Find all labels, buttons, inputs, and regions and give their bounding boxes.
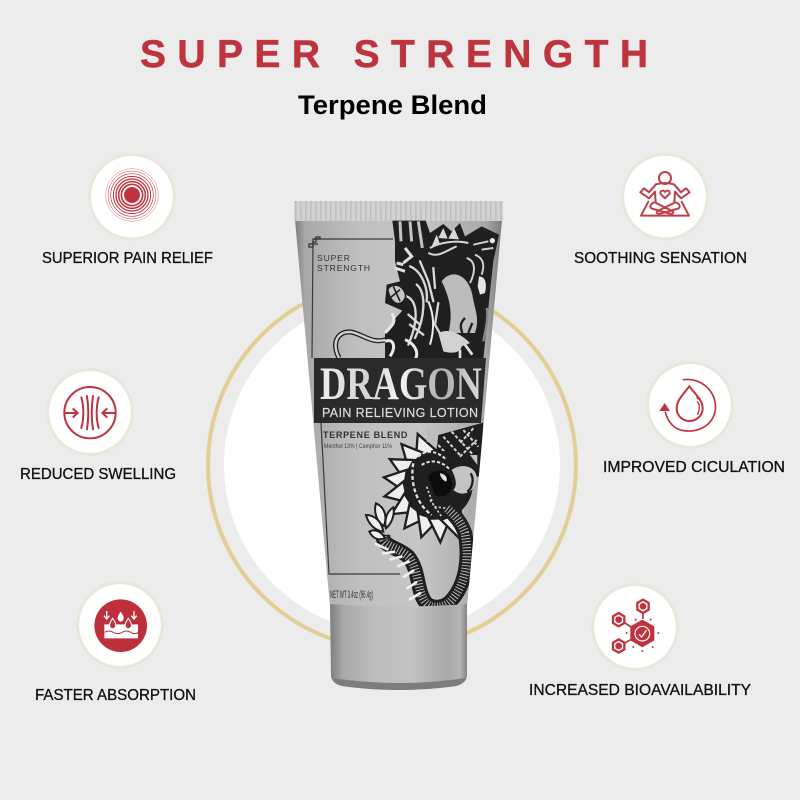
- icon: pain target: [90, 154, 174, 239]
- product tube: [294, 201, 503, 690]
- label: SOOTHING SENSATION: [574, 250, 747, 267]
- icon: skin absorption: [78, 583, 162, 667]
- feature: faster absorption: [35, 583, 196, 704]
- white backdrop circle: [224, 297, 560, 633]
- title: SUPER STRENGTH: [140, 33, 648, 76]
- label: IMPROVED CICULATION: [603, 459, 785, 476]
- black name band: [314, 358, 486, 423]
- dragon tail above the band: [336, 332, 388, 358]
- ingredient line: Menthol 13% | Camphor 11%: [324, 443, 392, 450]
- blend label: TERPENE BLEND: [323, 430, 408, 440]
- strength label second line: STRENGTH: [317, 263, 371, 273]
- crimped tube end: [294, 201, 503, 221]
- lower dragon illustration: [366, 423, 483, 607]
- tail leaves: [366, 503, 394, 539]
- tube cap: [330, 604, 467, 690]
- product descriptor: PAIN RELIEVING LOTION: [322, 406, 478, 420]
- icon: drop with arrow: [648, 363, 732, 447]
- gold ring behind the product: [208, 281, 576, 649]
- label: REDUCED SWELLING: [20, 466, 176, 483]
- serpent body and tail: [383, 508, 467, 607]
- product tube: NET WT 3.4oz (96.4g): [330, 589, 373, 601]
- knot emblem: [309, 237, 320, 247]
- mane: [382, 430, 470, 543]
- feature: soothing sensation: [574, 154, 747, 267]
- icon: molecule hexagons: [593, 585, 677, 669]
- label: FASTER ABSORPTION: [35, 687, 196, 704]
- icon: meditating figure: [623, 154, 707, 239]
- feature: reduced swelling: [20, 370, 176, 483]
- mesh neck at top right: [435, 423, 483, 477]
- label frame lines: [312, 239, 400, 574]
- tube body: [295, 220, 502, 607]
- label: SUPERIOR PAIN RELIEF: [42, 250, 213, 267]
- label: INCREASED BIOAVAILABILITY: [529, 682, 751, 699]
- cap lower rim shading: [332, 678, 466, 690]
- subtitle: Terpene Blend: [298, 90, 487, 120]
- upper dragon illustration: [385, 221, 499, 360]
- icon: inward compression: [48, 370, 132, 454]
- product name: DRAGON: [320, 358, 482, 410]
- feature: improved circulation: [603, 363, 785, 476]
- feature: increased bioavailability: [529, 585, 751, 699]
- feature: superior pain relief: [42, 154, 213, 267]
- strength label: SUPER: [317, 253, 351, 263]
